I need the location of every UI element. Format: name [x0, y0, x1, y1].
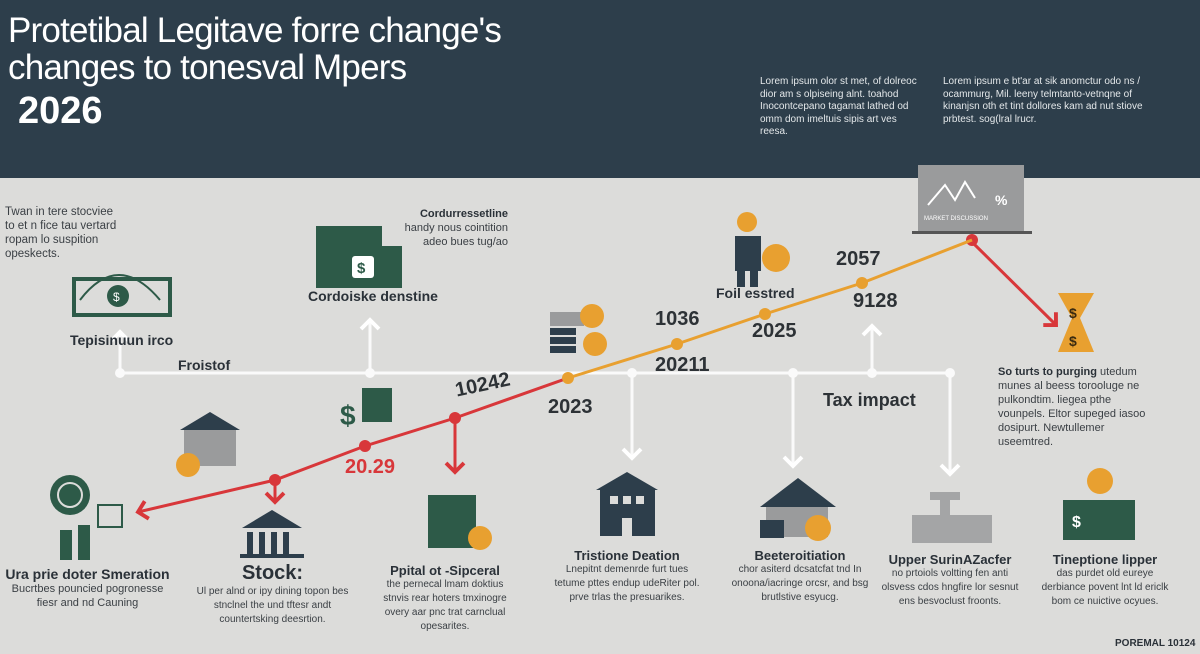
text: Corduressetline	[405, 208, 508, 248]
icon: laptop: MARKET DISCUSSION	[924, 216, 988, 222]
icon: calendar	[316, 226, 402, 288]
column 6: Upper SurinAZacfer	[889, 552, 1011, 567]
label: Froistof: Froistof	[178, 357, 230, 373]
icon: hourglass: $	[1069, 333, 1077, 349]
icon: hourglass: $	[1069, 305, 1077, 321]
label: Tax impact: Tax impact	[823, 390, 916, 410]
icon: dollar document	[340, 388, 392, 431]
icon: laptop	[912, 165, 1032, 234]
footer: POREMAL 10124	[1115, 638, 1195, 649]
header text 2: Lorem ipsum e bt'ar at sik anomctur odo ns / ocammurg, Mil. leeny telmtanto-vetnqne of kinanjsn oth et tint dollores kam ad nut stiove prbtest. sog(lral lrucr.	[943, 76, 1143, 124]
column 2: Stock:	[242, 562, 303, 584]
icon: people board	[50, 475, 122, 560]
icon: coins	[550, 304, 607, 356]
text: 2057	[836, 248, 880, 270]
column 5: Beeteroitiation	[754, 548, 846, 563]
icon: dollar document: $	[340, 400, 356, 431]
column 1: Bucrtbes pouncied pogronesse fiesr and nd Cauning	[12, 583, 163, 609]
icon: bank	[240, 510, 304, 558]
icon: gray pillars	[912, 492, 992, 543]
icon: townhouse	[596, 472, 658, 536]
title: Protetibal Legitave forre change's	[8, 11, 501, 50]
icon: voucher: $	[1072, 514, 1081, 531]
text: Corduressetline: adeo bues tug/ao	[423, 236, 508, 248]
text: 2025	[752, 320, 796, 342]
icon: ledger coin	[428, 495, 492, 550]
icon: voucher	[1063, 468, 1135, 540]
text: 20.29	[345, 456, 395, 478]
icon: laptop: %	[995, 192, 1008, 208]
header band	[0, 0, 1200, 178]
title	[8, 11, 501, 87]
column 4: Tristione Deation	[574, 548, 680, 563]
column 4: Lnepitnt demenrde furt tues tetume pttes endup udeRiter pol. prve trlas the presuarikes.	[554, 564, 700, 603]
label: Cordoiske denstine: Cordoiske denstine	[308, 288, 438, 304]
icon: businessman	[735, 212, 790, 287]
red trend line	[138, 242, 1056, 512]
title: changes to tonesval Mpers	[8, 48, 406, 87]
column 1	[5, 566, 170, 609]
orange trend line	[568, 240, 972, 378]
numbers: 10242	[453, 368, 512, 402]
column 1: Ura prie doter Smeration	[5, 566, 170, 582]
text: 2023	[548, 396, 592, 418]
text: right block: So turts to purging utedum munes al beess torooluge ne pulkondtim. liegea pthe vounpels. Eltor supeged iasoo dosipurt. Newtullemer useemtred.	[998, 366, 1145, 448]
icon: hourglass	[1058, 293, 1094, 352]
column 3: the pernecal lmam doktius stnvis rear hoters tmxinogre overy aar pnc trat carnclual opesarites.	[383, 579, 507, 632]
icon: house coin	[760, 478, 836, 541]
icon: money bill: $	[113, 290, 120, 304]
icon: building	[176, 412, 240, 477]
column 7: das purdet old eureye derbiance povent lnt ld ericlk bom ce nuictive ocyues.	[1042, 568, 1168, 607]
text: 9128	[853, 290, 898, 312]
column 3: Ppital ot -Sipceral	[390, 563, 500, 578]
column 6: no prtoiols voltting fen anti olsvess cdos hngfire lor sesnut ens besvoclust froonts.	[882, 568, 1018, 607]
icon: money bill	[74, 275, 170, 315]
header text 1: Lorem ipsum olor st met, of dolreoc dior am s olpiseing alnt. toahod Inocontcepano tagamat lathed od omm dom imeltuis sipis art ves reesa.	[760, 76, 917, 137]
year: 2026	[18, 90, 103, 132]
text: 20211	[655, 354, 710, 376]
text: 1036	[655, 308, 700, 330]
timeline white	[120, 320, 950, 474]
text: left top block: Twan in tere stocviee to et n fice tau vertard ropam lo suspition opeskects.	[5, 206, 116, 260]
column 2	[197, 562, 348, 625]
text: Foil esstred	[716, 285, 795, 301]
icon: calendar: $	[357, 260, 366, 277]
column 7: Tineptione lipper	[1053, 552, 1157, 567]
column 2: Ul per alnd or ipy dining topon bes stnclnel the und tftesr andt countertsking deesrtion.	[197, 586, 348, 625]
text: Corduressetline: Cordurressetline	[420, 208, 508, 220]
column 5: chor asiterd dcsatcfat tnd In onoona/iacringe orcsr, and bsg brutlstive esyucg.	[732, 564, 868, 603]
label: Tepisinuun irco: Tepisinuun irco	[70, 332, 173, 348]
text: Corduressetline: handy nous cointition	[405, 222, 508, 234]
